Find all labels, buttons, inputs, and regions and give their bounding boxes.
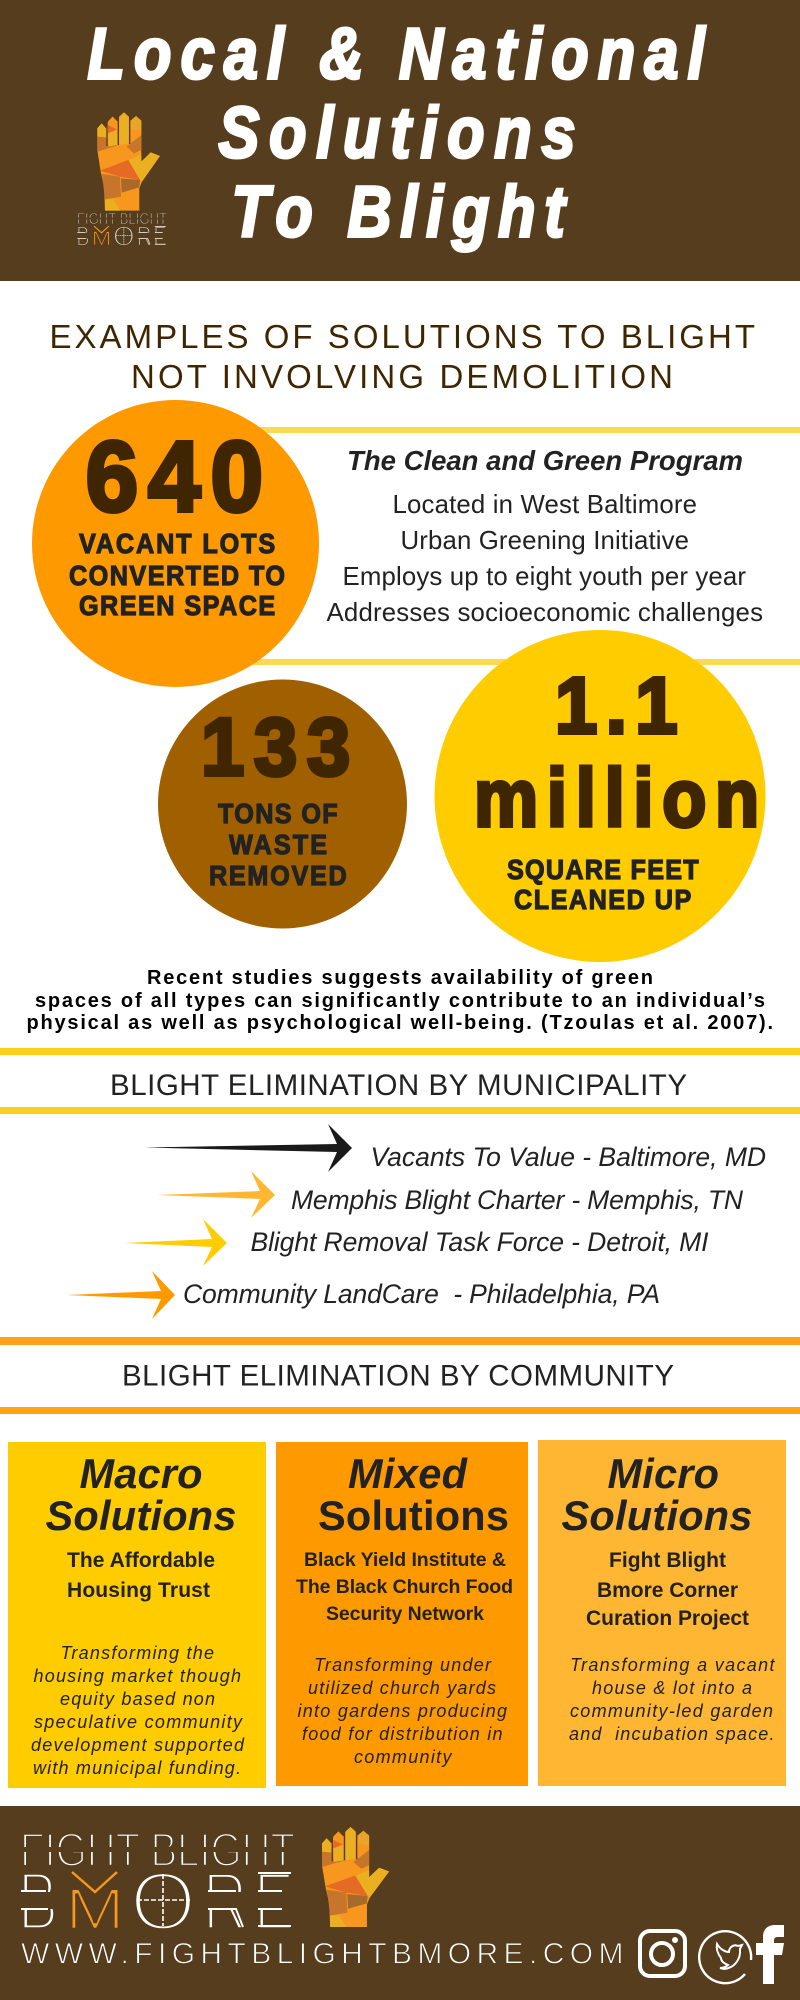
panel: header banner [0,0,800,281]
arrow: memphis [157,1171,275,1218]
title: Local & National [88,15,706,95]
panel: 640 vacant lots circle: VACANT LOTS [79,528,275,559]
text block: green space research note: spaces of all types can significantly contribute to an individual’s [35,990,765,1012]
panel: 640 vacant lots circle: GREEN SPACE [79,590,275,621]
arrow: detroit [125,1219,227,1266]
icon: hand logo [322,1827,389,1927]
label: memphis: Memphis Blight Charter - Memphis, TN [291,1185,744,1215]
text block: green space research note: physical as well as psychological well-being. (Tzoulas et al. 2007). [26,1012,773,1034]
text block: clean and green program: Located in West Baltimore [392,491,697,519]
panel: micro solutions: and incubation space. [569,1724,774,1744]
logo wordmark: O [130,1854,196,1948]
panel: 1.1 million circle: million [474,753,759,844]
panel: micro solutions: Transforming a vacant [570,1655,775,1675]
icon: hand logo [97,112,160,211]
panel: mixed solutions: Transforming under [314,1655,492,1675]
title: To Blight [232,173,567,253]
text block: clean and green program: Employs up to eight youth per year [342,563,746,591]
panel: mixed solutions: Solutions [318,1492,509,1539]
logo wordmark [76,211,167,251]
panel: 1.1 million circle: SQUARE FEET [507,854,699,885]
panel: micro solutions: house & lot into a [592,1678,752,1698]
icon: instagram [640,1931,685,1976]
logo wordmark: O [113,220,135,251]
panel: mixed solutions: Black Yield Institute & [304,1549,506,1571]
panel: mixed solutions [276,1442,528,1786]
panel: 133 tons circle: 133 [201,701,350,792]
text block: clean and green program: Addresses socioeconomic challenges [326,599,763,627]
panel: mixed solutions: utilized church yards [308,1678,496,1698]
panel: mixed solutions: The Black Church Food [296,1576,513,1598]
panel: mixed solutions: into gardens producing [298,1701,507,1721]
panel: 640 vacant lots circle: 640 [86,421,263,533]
panel: macro solutions: development supported [31,1735,245,1755]
logo wordmark [18,1823,296,1948]
panel: mixed solutions: Security Network [326,1603,484,1625]
panel: mixed solutions: food for distribution in [302,1724,502,1744]
panel: macro solutions: Housing Trust [67,1579,210,1602]
label: detroit: Blight Removal Task Force - Detroit, MI [250,1227,709,1257]
panel: footer [0,1806,800,2000]
logo wordmark: E [254,1854,294,1948]
label: vacants to value: Vacants To Value - Baltimore, MD [370,1142,766,1172]
panel: 1.1 million circle [434,630,766,962]
logo wordmark: R [137,220,151,251]
logo wordmark: FIGHT BLIGHT [77,211,167,228]
text block: green space research note [26,967,773,1034]
icon: facebook [756,1925,784,1984]
panel: macro solutions: Transforming the [60,1643,214,1663]
logo wordmark: E [154,220,167,251]
panel: 1.1 million circle: 1.1 [555,660,678,750]
title [88,15,706,253]
panel: macro solutions: equity based non [60,1689,215,1709]
website url: WWW.FIGHTBLIGHTBMORE.COM [21,1938,624,1970]
panel: mixed solutions: community [354,1747,452,1767]
panel: micro solutions: Solutions [562,1492,752,1539]
panel: 133 tons circle: WASTE [229,829,327,860]
panel: macro solutions: speculative community [34,1712,243,1732]
text block: green space research note: Recent studies suggests availability of green [147,967,653,989]
panel: macro solutions: housing market though [34,1666,241,1686]
logo wordmark: FIGHT BLIGHT [20,1823,295,1876]
panel: 1.1 million circle: CLEANED UP [514,884,691,915]
arrow: philadelphia [67,1271,175,1319]
heading: by community: BLIGHT ELIMINATION BY COMMUNITY [122,1360,674,1392]
text block: clean and green program: The Clean and Green Program [347,445,743,476]
panel: micro solutions: Micro [608,1450,719,1497]
panel: macro solutions: The Affordable [67,1549,215,1572]
logo wordmark: R [203,1854,247,1948]
panel: macro solutions: Macro [80,1450,202,1497]
panel: macro solutions: Solutions [46,1492,236,1539]
panel: macro solutions [8,1442,266,1788]
logo wordmark: B [18,1854,58,1948]
icon: twitter [699,1931,751,1983]
logo wordmark: M [65,1877,125,1942]
title: Solutions [218,94,576,174]
panel: micro solutions: Curation Project [586,1607,749,1630]
panel: 640 vacant lots circle [32,400,319,687]
panel: 133 tons circle: REMOVED [209,860,347,891]
heading: examples of solutions: EXAMPLES OF SOLUTIONS TO BLIGHT [50,318,755,355]
text block: clean and green program: Urban Greening Initiative [400,527,689,555]
heading: examples of solutions [50,318,755,395]
heading: examples of solutions: NOT INVOLVING DEMOLITION [131,358,673,395]
panel: micro solutions [538,1440,786,1786]
panel: mixed solutions: Mixed [348,1450,469,1497]
panel: 133 tons circle [158,680,407,928]
text block: clean and green program [326,445,763,627]
panel: micro solutions: Bmore Corner [597,1579,738,1602]
heading: by municipality: BLIGHT ELIMINATION BY MUNICIPALITY [110,1069,687,1102]
logo wordmark: M [92,229,111,250]
arrow: vacants to value [144,1124,352,1172]
logo wordmark: B [76,220,89,251]
panel: micro solutions: Fight Blight [609,1549,726,1572]
panel: 133 tons circle: TONS OF [218,798,338,829]
panel: micro solutions: community-led garden [570,1701,773,1721]
panel: macro solutions: with municipal funding. [33,1758,241,1778]
panel: 640 vacant lots circle: CONVERTED TO [69,560,285,591]
label: philadelphia: Community LandCare - Philadelphia, PA [183,1279,660,1309]
